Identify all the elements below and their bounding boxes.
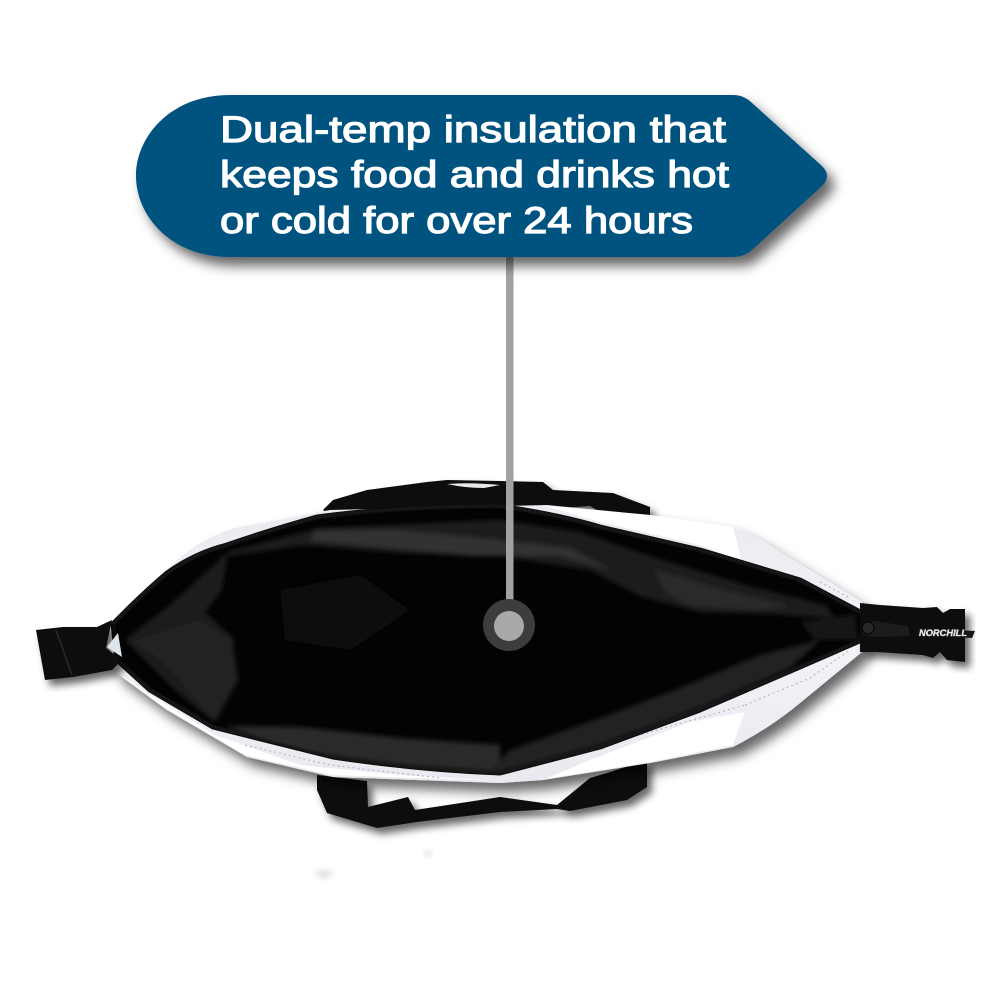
top carry handle (323, 480, 650, 520)
zipper pull (862, 621, 910, 637)
banner text: keeps food and drinks hot (220, 154, 730, 195)
leader line (506, 256, 514, 624)
infographic canvas (36, 95, 976, 880)
banner text (220, 109, 730, 241)
black interior lining (113, 506, 862, 773)
body panel shading (115, 506, 745, 781)
banner text: Dual-temp insulation that (220, 109, 727, 150)
product: cooler bag, top view (36, 480, 975, 828)
left reflective corner (107, 633, 122, 657)
brand tag: NORCHILL (919, 628, 967, 638)
banner text: or cold for over 24 hours (220, 200, 693, 241)
bottom carry handle (317, 760, 647, 828)
lining folds (125, 520, 858, 772)
left buckle (36, 620, 122, 680)
right strap and buckle (860, 603, 965, 662)
insulated white body (113, 505, 862, 783)
banner shape (136, 95, 827, 257)
body stitching (245, 582, 850, 778)
zipper (113, 506, 862, 773)
callout banner (136, 95, 827, 257)
handle highlight (447, 483, 500, 488)
faint floor marks (316, 851, 432, 878)
callout target dot (483, 599, 535, 651)
